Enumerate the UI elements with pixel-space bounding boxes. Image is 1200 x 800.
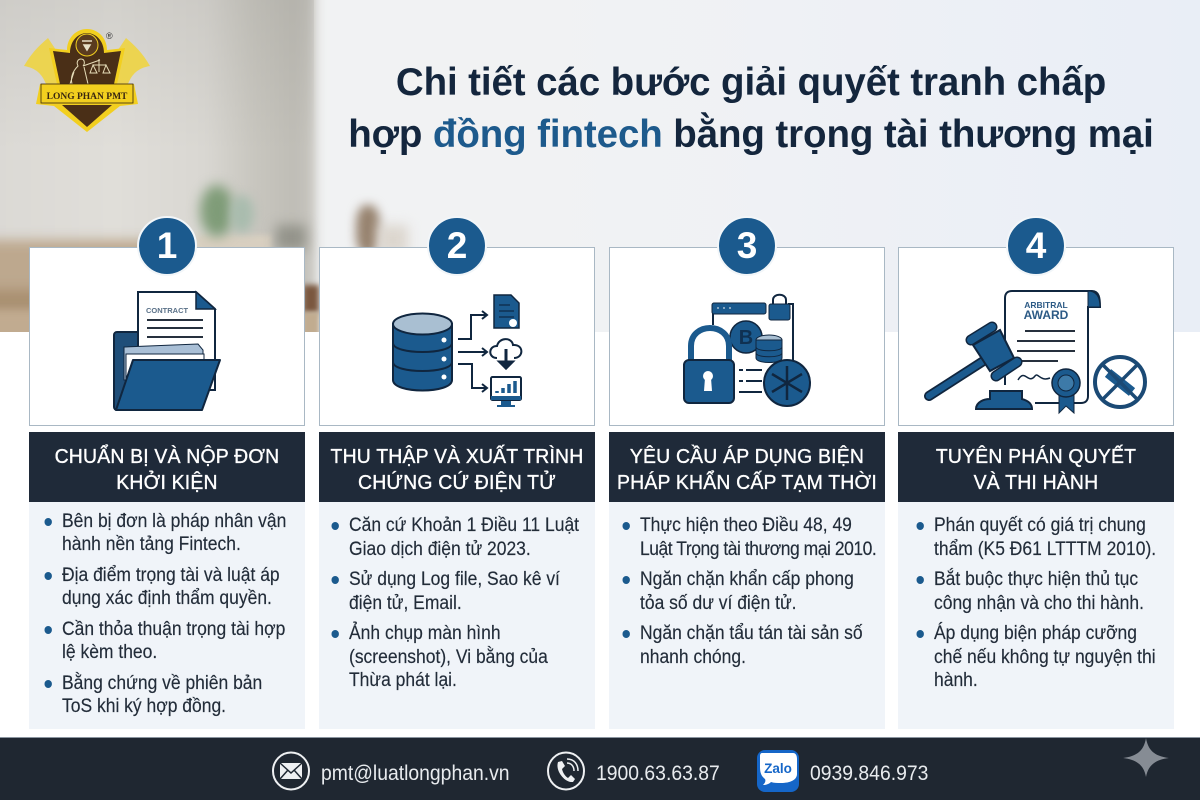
footer: contact bar (0, 737, 1200, 800)
text: step 1 bullets: hành nền tảng Fintech. (62, 534, 241, 555)
heading: step 3: PHÁP KHẨN CẤP TẠM THỜI (617, 472, 877, 494)
text: step 1 bullets: Bên bị đơn là pháp nhân vận (62, 510, 286, 532)
text: step 4 bullets: Bắt buộc thực hiện thủ tục (934, 569, 1138, 590)
logo: Long Phan PMT (24, 29, 150, 132)
logo: Long Phan PMT: LONG PHAN PMT (47, 92, 128, 102)
icon: database and exports (392, 294, 522, 407)
text: step 3 bullets: Ngăn chặn tẩu tán tài sản số (640, 623, 863, 644)
icon: email (272, 752, 310, 790)
badge: number 3: 3 (737, 225, 757, 266)
text: step 3 bullets: Luật Trọng tài thương mại 2010. (640, 538, 876, 560)
heading: step 4: TUYÊN PHÁN QUYẾT (936, 446, 1136, 468)
badge: number 4: 4 (1026, 225, 1046, 266)
text: step 3 bullets: Ngăn chặn khẩn cấp phong (640, 569, 854, 590)
text: step 3 bullets: tỏa số dư ví điện tử. (640, 592, 797, 614)
title: hợp đồng fintech bằng trọng tài thương mại (348, 113, 1154, 156)
badge: number 3 (717, 216, 777, 276)
title (348, 61, 1154, 156)
text: step 1 bullets: lệ kèm theo. (62, 642, 157, 663)
background photo (0, 0, 1200, 332)
icon: gavel and arbitral award (924, 290, 1147, 414)
text: step 4 bullets: Phán quyết có giá trị chung (934, 515, 1146, 536)
text: step 3 bullets: Thực hiện theo Điều 48, 49 (640, 515, 852, 536)
heading: step 3: YÊU CẦU ÁP DỤNG BIỆN (630, 446, 864, 468)
text: step 2 bullets: Sử dụng Log file, Sao kê ví (349, 569, 560, 590)
badge: number 1 (137, 216, 197, 276)
icon: sparkle (1124, 738, 1168, 777)
card: illustration 2 (319, 247, 595, 426)
icon: lock, crypto and freeze (683, 294, 811, 407)
icon: Zalo: Zalo (764, 761, 792, 776)
text: step 2 bullets: Căn cứ Khoản 1 Điều 11 Luật (349, 515, 579, 536)
text: step 4 bullets: Áp dụng biện pháp cưỡng (934, 623, 1137, 644)
badge: number 2 (427, 216, 487, 276)
text: step 1 bullets: ToS khi ký hợp đồng. (62, 696, 226, 717)
heading: step 1: CHUẨN BỊ VÀ NỘP ĐƠN (55, 446, 279, 468)
text: step 1 bullets: Cần thỏa thuận trọng tài hợp (62, 618, 285, 640)
icon: Zalo (757, 750, 799, 792)
heading: step 2: CHỨNG CỨ ĐIỆN TỬ (358, 472, 556, 494)
card: illustration 1 (29, 247, 305, 426)
badge: number 4 (1006, 216, 1066, 276)
heading: step 3 (609, 432, 885, 502)
panel: step 1 (29, 216, 305, 729)
heading: step 2: THU THẬP VÀ XUẤT TRÌNH (331, 446, 583, 468)
text: step 1 bullets: Địa điểm trọng tài và luật áp (62, 564, 280, 586)
text: step 3 bullets (609, 502, 885, 729)
panel: step 4 (898, 218, 1174, 729)
text: step 1 bullets (29, 502, 305, 729)
text: step 4 bullets: chế nếu không tự nguyện thi (934, 646, 1156, 668)
text: step 2 bullets (319, 502, 595, 729)
panel: step 3 (609, 218, 885, 729)
heading: step 1: KHỞI KIỆN (116, 472, 218, 494)
text: step 2 bullets: Ảnh chụp màn hình (349, 623, 501, 644)
text: step 4 bullets: hành. (934, 670, 978, 691)
icon: folder with contract (113, 290, 221, 411)
icon: phone (547, 752, 585, 790)
icon: folder with contract: CONTRACT (146, 306, 188, 315)
text: step 2 bullets: Giao dịch điện tử 2023. (349, 538, 531, 560)
text: step 1 bullets: dụng xác định thẩm quyền. (62, 588, 272, 609)
badge: number 2: 2 (447, 225, 467, 266)
icon: gavel and arbitral award: AWARD (1024, 308, 1069, 322)
text: email: pmt@luatlongphan.vn (321, 761, 510, 785)
panel: step 2 (319, 218, 595, 729)
heading: step 1 (29, 432, 305, 502)
icon: gavel and arbitral award: ARBITRAL (1024, 300, 1068, 310)
text: step 3 bullets: nhanh chóng. (640, 646, 746, 668)
logo: Long Phan PMT: ® (106, 31, 113, 41)
card: illustration 4 (898, 247, 1174, 426)
heading: step 2 (319, 432, 595, 502)
text: step 1 bullets: Bằng chứng về phiên bản (62, 672, 262, 694)
text: step 4 bullets: thẩm (K5 Đ61 LTTTM 2010). (934, 538, 1156, 560)
heading: step 4: VÀ THI HÀNH (974, 472, 1098, 494)
title: Chi tiết các bước giải quyết tranh chấp (396, 61, 1106, 104)
badge: number 1: 1 (157, 225, 177, 266)
text: step 4 bullets: công nhận và cho thi hành. (934, 592, 1144, 614)
text: hotline: 1900.63.63.87 (596, 761, 720, 785)
heading: step 4 (898, 432, 1174, 502)
card: illustration 3 (609, 247, 885, 426)
text: step 2 bullets: điện tử, Email. (349, 592, 462, 614)
text: step 2 bullets: Thừa phát lại. (349, 670, 457, 691)
icon: lock, crypto and freeze: B (739, 327, 753, 349)
text: zalo number: 0939.846.973 (810, 761, 928, 785)
text: step 2 bullets: (screenshot), Vi bằng của (349, 646, 548, 668)
text: step 4 bullets (898, 502, 1174, 729)
